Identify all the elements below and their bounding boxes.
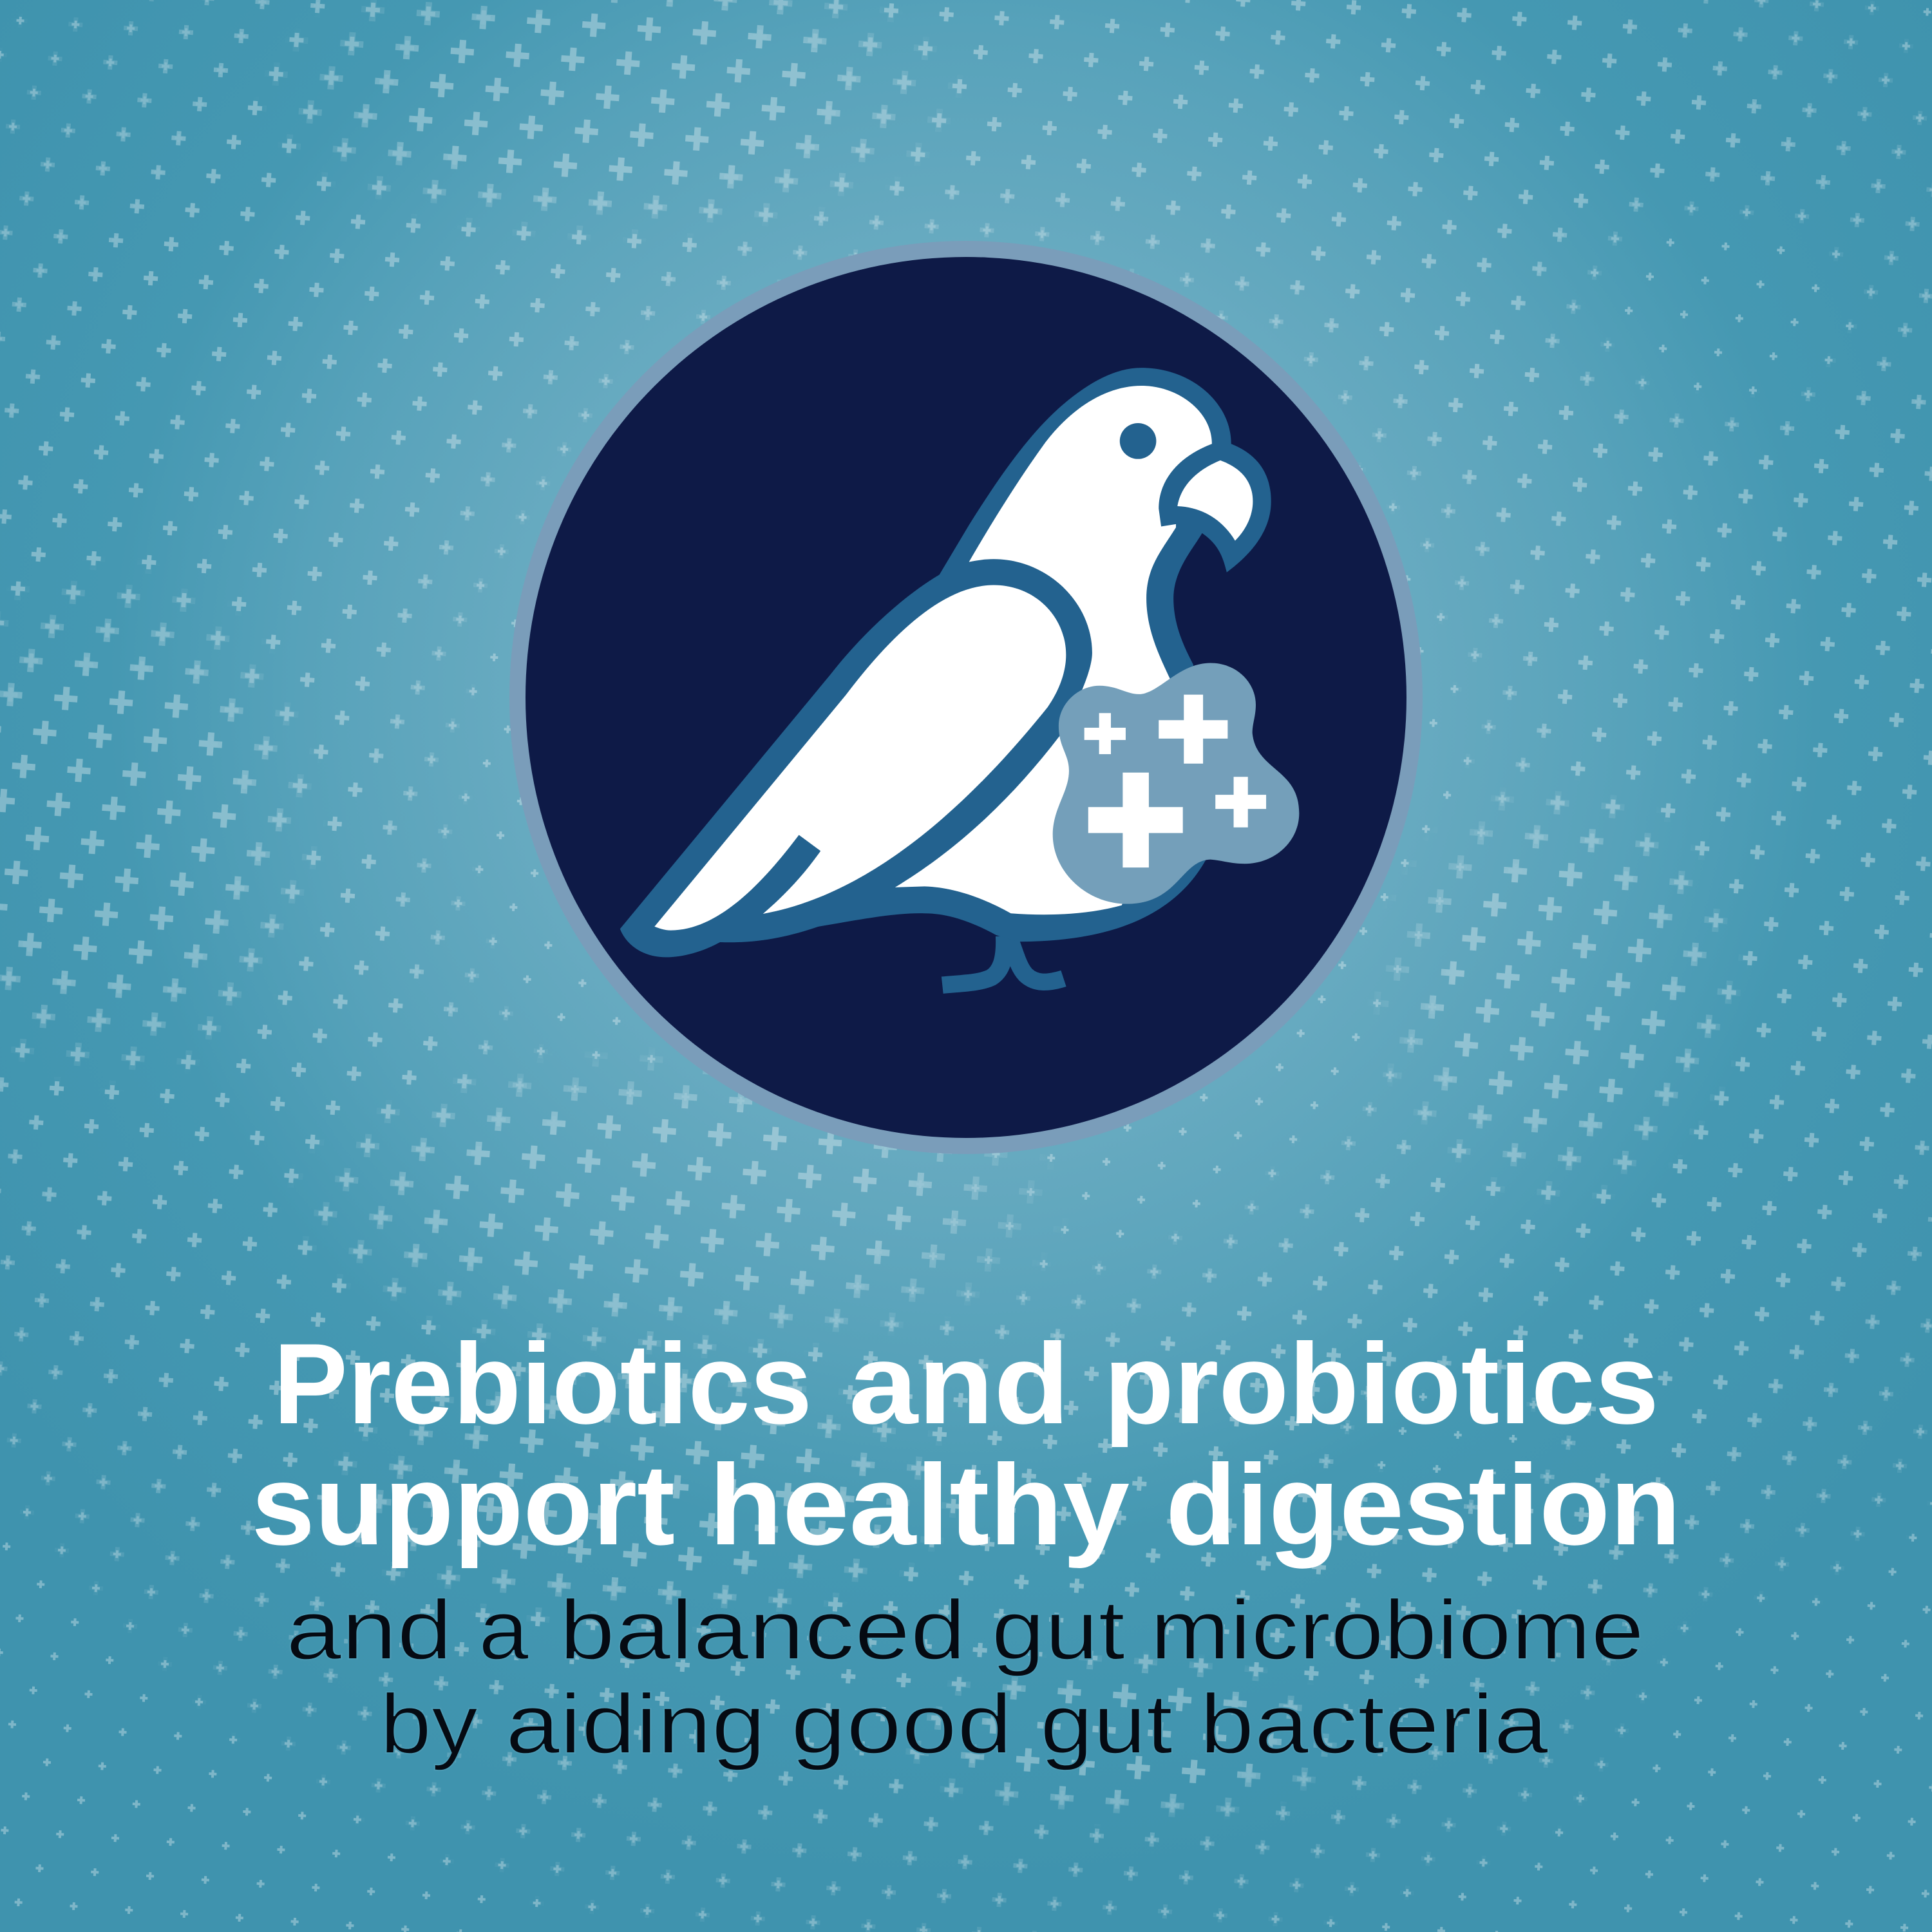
bird beak	[1177, 460, 1253, 541]
heading: digestion	[1166, 1441, 1681, 1569]
heading: and	[849, 1320, 1070, 1448]
heading: Prebiotics	[273, 1320, 812, 1448]
heading	[251, 1320, 1681, 1569]
body text: bacteria	[1200, 1676, 1548, 1771]
bird head and body	[895, 386, 1212, 914]
bird outline	[620, 368, 1271, 957]
heading: healthy	[709, 1441, 1130, 1569]
bird wing	[654, 585, 1066, 931]
bird legs	[942, 936, 1064, 985]
icon: bird with probiotic blob	[620, 368, 1299, 985]
body text	[286, 1582, 1644, 1771]
body text: gut	[1040, 1676, 1173, 1771]
body text: a	[478, 1582, 529, 1677]
heading: support	[251, 1441, 675, 1569]
body text: by	[380, 1676, 478, 1771]
body text: balanced	[559, 1582, 966, 1677]
body text: microbiome	[1150, 1582, 1644, 1677]
heading: probiotics	[1104, 1320, 1659, 1448]
body text: and	[286, 1582, 452, 1677]
probiotic blob	[1053, 663, 1299, 904]
bird eye	[1120, 423, 1156, 459]
body text: good	[791, 1676, 1012, 1771]
body text: aiding	[506, 1676, 766, 1771]
circular badge	[509, 241, 1423, 1154]
body text: gut	[992, 1582, 1125, 1677]
